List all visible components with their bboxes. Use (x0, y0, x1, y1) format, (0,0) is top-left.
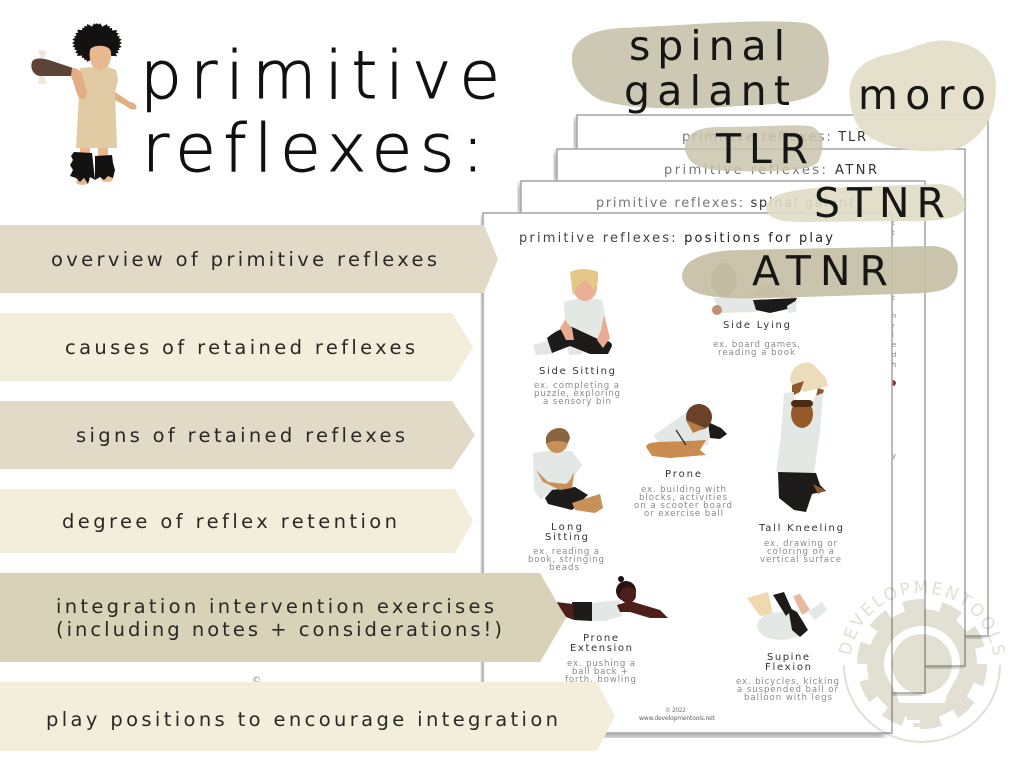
blob label: spinal galant: galant (624, 67, 790, 115)
edge fragments of page text: h (892, 361, 896, 369)
edge fragments of page text: y (892, 452, 896, 460)
page footer: www.developmentools.net (639, 715, 716, 722)
label: tall kneeling: vertical surface (760, 555, 841, 565)
label: tall kneeling: coloring on a (767, 547, 834, 557)
label: supine flexion: ex. bicycles, kicking (736, 677, 839, 687)
label: long sitting: Sitting (545, 532, 588, 543)
label: prone: or exercise ball (644, 509, 723, 519)
dress (76, 67, 118, 148)
label: long sitting: book, stringing (528, 555, 604, 565)
edge fragments of page text: t (892, 294, 895, 302)
page footer: © 2022 (665, 707, 686, 714)
label: supine flexion: a suspended ball or (737, 685, 838, 695)
page: ATNR (554, 149, 965, 668)
label: prone extension: forth, bowling (565, 675, 636, 685)
figure: long sitting (533, 428, 603, 513)
stray copyright mark: © (252, 676, 261, 686)
label: prone extension: ball back + (572, 667, 628, 677)
label: prone extension: ex. pushing a (567, 659, 635, 669)
edge fragments of page text: n (892, 312, 896, 320)
title (140, 37, 500, 187)
label: prone: blocks, activities (639, 493, 728, 503)
page: spinal galant (518, 181, 925, 695)
icon: wooden club (31, 58, 73, 76)
label: side lying: ex. board games, (713, 340, 800, 350)
blob label: moro: moro (858, 71, 986, 119)
label: prone extension: Prone (583, 633, 618, 644)
label: supine flexion: Supine (767, 652, 809, 663)
label: long sitting: ex. reading a (533, 547, 599, 557)
page heading: primitive reflexes: positions for play (519, 231, 833, 246)
chevron: integration intervention exercises: (including notes + considerations!) (56, 618, 502, 641)
hair (69, 19, 125, 64)
edge fragments of page text: i (892, 331, 894, 339)
label: supine flexion: Flexion (765, 662, 811, 673)
chevron: signs of retained reflexes: signs of retained reflexes (76, 424, 405, 447)
label: long sitting: beads (549, 563, 580, 573)
icon: bone (37, 50, 47, 84)
label: long sitting (528, 522, 604, 573)
label: long sitting: Long (551, 522, 582, 533)
blob label: ATNR: ATNR (752, 247, 888, 295)
blob label: TLR (685, 125, 823, 173)
blob label: TLR: TLR (715, 125, 808, 173)
figure: supine flexion (747, 592, 827, 640)
label: side sitting: a sensory bin (543, 397, 611, 407)
edge fragments of page text: t (892, 229, 895, 237)
label: prone: Prone (665, 469, 701, 480)
chevron: degree of reflex retention (0, 489, 473, 553)
title illustration: caveman child (31, 19, 137, 185)
watermark: developmentools gear logo (838, 580, 1006, 743)
page footer (639, 707, 716, 722)
chevron: overview of primitive reflexes: overview of primitive reflexes (51, 248, 437, 271)
chevron: causes of retained reflexes (0, 313, 473, 381)
figure: tall kneeling (776, 362, 828, 512)
edge fragments of page text: d (892, 351, 896, 359)
label: side lying: reading a book (718, 348, 795, 358)
page: TLR (574, 115, 988, 638)
label: side sitting: ex. completing a (534, 381, 619, 391)
label: side lying: Side Lying (723, 320, 790, 331)
figure: side lying (711, 263, 797, 315)
label: prone: ex. building with (641, 485, 726, 495)
page: spinal galant: primitive reflexes: spinal galant (596, 196, 854, 211)
blob label: spinal galant (572, 21, 829, 115)
figure: prone (646, 404, 727, 458)
label: prone: on a scooter board (634, 501, 732, 511)
edge fragments of page text: t (892, 219, 895, 227)
page: ATNR: primitive reflexes: ATNR (664, 163, 877, 178)
title: primitive (140, 37, 500, 114)
page: positions for play (481, 213, 892, 737)
page: TLR: primitive reflexes: TLR (682, 130, 866, 145)
blob label: moro (849, 41, 996, 151)
page stack (481, 115, 988, 737)
blob label: STNR (766, 179, 965, 227)
chevron: play positions to encourage integration: play positions to encourage integration (46, 708, 558, 731)
watermark: developmentools gear logo: DEVELOPMENTOOLS (838, 580, 1006, 655)
chevron: degree of reflex retention: degree of reflex retention (62, 510, 397, 533)
edge fragments of page text (890, 219, 896, 460)
legs and fur boots (70, 148, 115, 185)
label: tall kneeling (758, 523, 843, 565)
title: reflexes: (142, 110, 484, 187)
label: tall kneeling: ex. drawing or (764, 539, 837, 549)
label: prone extension (565, 633, 636, 685)
chevron: signs of retained reflexes (0, 401, 475, 469)
label: tall kneeling: Tall Kneeling (758, 523, 843, 534)
chevron: overview of primitive reflexes (0, 225, 498, 293)
arms (71, 68, 137, 110)
chevron: integration intervention exercises (0, 573, 566, 662)
blob label: ATNR (682, 246, 958, 298)
edge fragments of page text: e (892, 341, 896, 349)
blob label: spinal galant: spinal (629, 22, 785, 70)
label: supine flexion (736, 652, 839, 703)
chevron: causes of retained reflexes: causes of retained reflexes (65, 336, 415, 359)
label: side sitting: Side Sitting (539, 366, 615, 377)
blob label: STNR: STNR (814, 179, 945, 227)
label: prone extension: Extension (570, 643, 632, 654)
label: prone (634, 469, 732, 519)
label: side sitting (534, 366, 620, 407)
figure: side sitting (533, 269, 612, 355)
chevron: play positions to encourage integration (0, 682, 615, 751)
head (90, 46, 111, 72)
label: side sitting: puzzle, exploring (534, 389, 620, 399)
figure: prone extension (556, 576, 668, 621)
label: side lying (713, 320, 800, 358)
label: supine flexion: balloon with legs (744, 693, 833, 703)
edge fragments of page text: r (892, 322, 895, 330)
chevron: integration intervention exercises: integration intervention exercises (56, 595, 494, 618)
